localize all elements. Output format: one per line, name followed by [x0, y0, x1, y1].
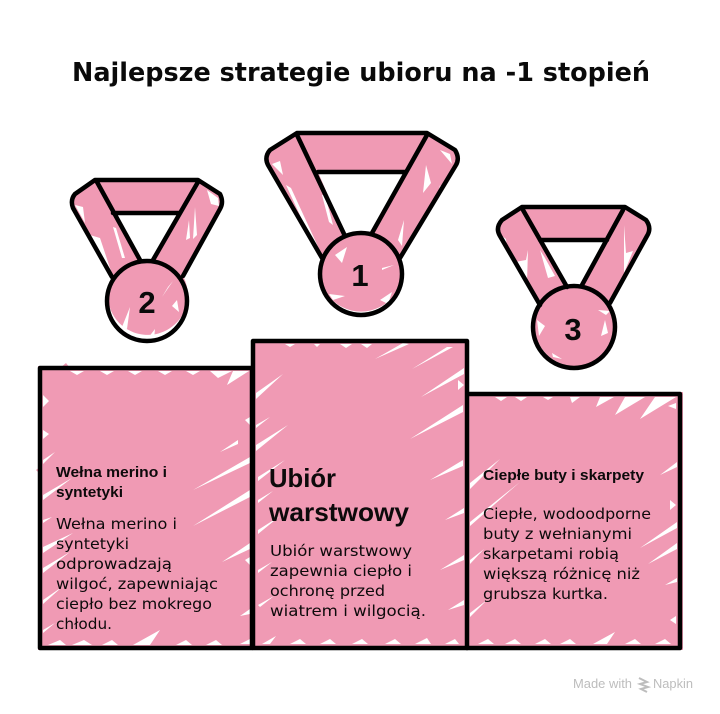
- text: block 2: odprowadzają: [56, 555, 172, 573]
- text: block 1: warstwowy: [268, 497, 410, 527]
- text: block 3: [483, 467, 651, 603]
- text: block 2: [56, 464, 218, 633]
- text: block 1: wiatrem i wilgocią.: [270, 602, 426, 620]
- heading: block 1: Ubiór: [269, 463, 336, 493]
- text: block 1: [268, 463, 426, 620]
- podium block 2: [36, 363, 255, 650]
- medal 3: [498, 207, 649, 368]
- medal 1 number: 1: [351, 258, 369, 293]
- text: block 2: ciepło bez mokrego: [56, 595, 212, 613]
- watermark: Napkin: [653, 676, 693, 691]
- text: block 2: wilgoć, zapewniając: [56, 575, 218, 593]
- heading: block 2: Wełna merino i: [56, 464, 167, 481]
- medal 1: [266, 133, 458, 315]
- watermark: Made with: [573, 676, 632, 691]
- text: block 1: zapewnia ciepło i: [270, 562, 412, 580]
- title: Najlepsze strategie ubioru na -1 stopień: [72, 58, 650, 88]
- podium block 3: [467, 392, 683, 650]
- text: block 3: grubsza kurtka.: [483, 585, 608, 603]
- text: block 2: syntetyki: [56, 484, 123, 501]
- text: block 3: Ciepłe, wodoodporne: [483, 505, 651, 523]
- watermark: [573, 676, 693, 692]
- medal 2 number: 2: [138, 285, 156, 320]
- text: block 2: chłodu.: [56, 615, 112, 633]
- text: block 3: buty z wełnianymi: [483, 525, 632, 543]
- text: block 3: skarpetami robią: [483, 545, 619, 563]
- podium block 1: [253, 341, 468, 650]
- text: block 2: Wełna merino i: [56, 515, 177, 533]
- text: block 2: syntetyki: [56, 535, 129, 553]
- text: block 1: ochronę przed: [270, 582, 385, 600]
- medal 2: [72, 180, 222, 341]
- medal 3 number: 3: [564, 312, 582, 347]
- icon: napkin logo: [639, 678, 648, 692]
- heading: block 3: Ciepłe buty i skarpety: [483, 467, 645, 484]
- text: block 3: większą różnicę niż: [483, 565, 640, 583]
- text: block 1: Ubiór warstwowy: [270, 542, 412, 560]
